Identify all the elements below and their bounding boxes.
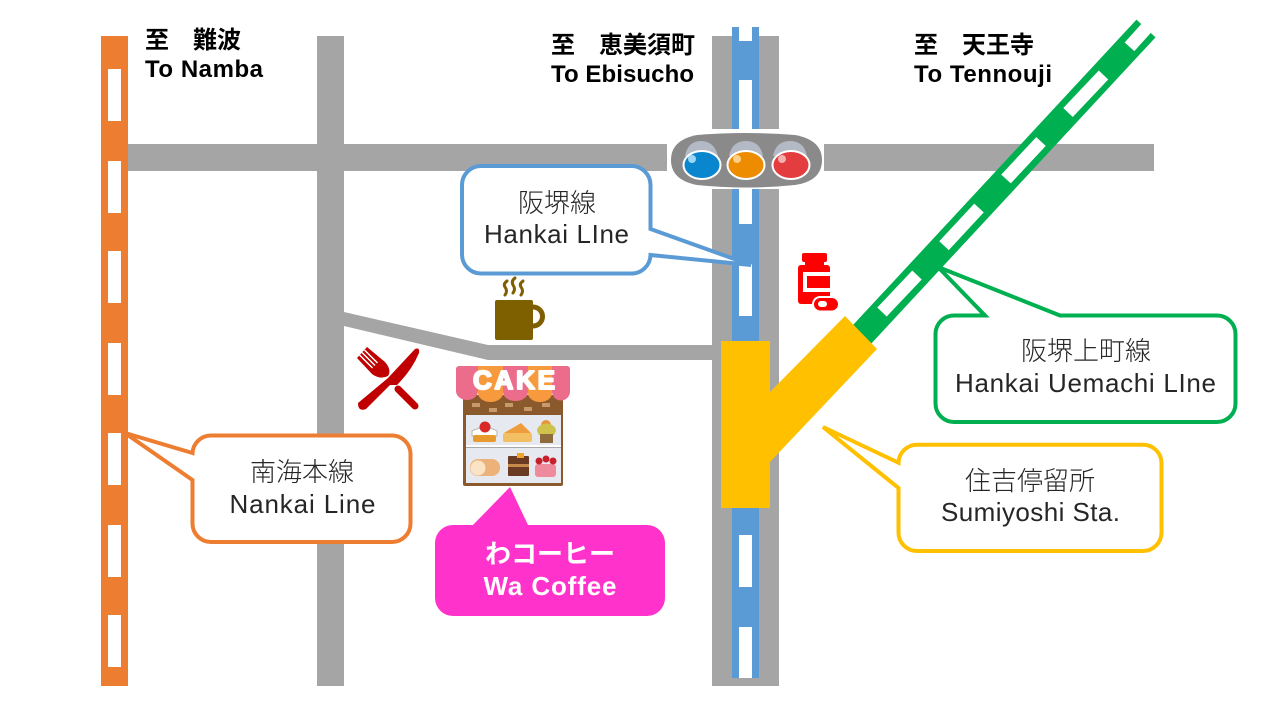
callout: Hankai Line <box>462 166 751 274</box>
callout: Hankai Uemachi Line: 阪堺上町線 <box>1021 336 1151 366</box>
awning: CAKE <box>473 365 555 395</box>
direction label: To Ebisucho: 至 恵美須町 <box>551 32 695 59</box>
direction label: To Tennouji: 至 天王寺 <box>914 32 1034 59</box>
callout: Nankai Line: 南海本線 <box>250 457 354 487</box>
direction label: To Namba: 至 難波 <box>145 27 241 54</box>
callout: Hankai Line: Hankai LIne <box>484 219 629 249</box>
callout: Sumiyoshi Station <box>823 427 1162 551</box>
direction label: To Ebisucho: To Ebisucho <box>551 61 694 88</box>
direction label: To Ebisucho <box>551 32 695 88</box>
callout: Sumiyoshi Station: 住吉停留所 <box>965 466 1095 496</box>
callout: Sumiyoshi Station: Sumiyoshi Sta. <box>941 497 1120 527</box>
direction label: To Tennouji: To Tennouji <box>914 61 1052 88</box>
icon: coffee cup <box>495 278 542 340</box>
callout: Nankai Line <box>125 433 410 542</box>
direction label: To Namba <box>145 27 264 83</box>
callout: Nankai Line: Nankai Line <box>230 489 376 519</box>
roads <box>128 36 1154 686</box>
callout: Wa Coffee <box>435 487 665 616</box>
station building: Sumiyoshi <box>721 316 877 508</box>
icon: cake shop <box>456 365 570 486</box>
callout: Hankai Uemachi Line: Hankai Uemachi LIne <box>955 368 1216 398</box>
direction label: To Tennouji <box>914 32 1052 88</box>
icon: pharmacy medicine bottle <box>798 253 840 312</box>
Hankai Uemachi railway line <box>855 24 1150 342</box>
cakes <box>470 420 556 477</box>
icon: traffic light <box>667 129 824 189</box>
Nankai railway line <box>101 36 128 686</box>
callout: Wa Coffee: Wa Coffee <box>484 571 616 601</box>
Hankai tram line <box>732 27 759 678</box>
callout: Wa Coffee: わコーヒー <box>485 539 615 569</box>
icon: restaurant fork and knife <box>357 347 419 410</box>
direction label: To Namba: To Namba <box>145 56 264 83</box>
callout: Hankai Uemachi Line <box>936 267 1236 422</box>
callout: Hankai Line: 阪堺線 <box>518 188 596 218</box>
